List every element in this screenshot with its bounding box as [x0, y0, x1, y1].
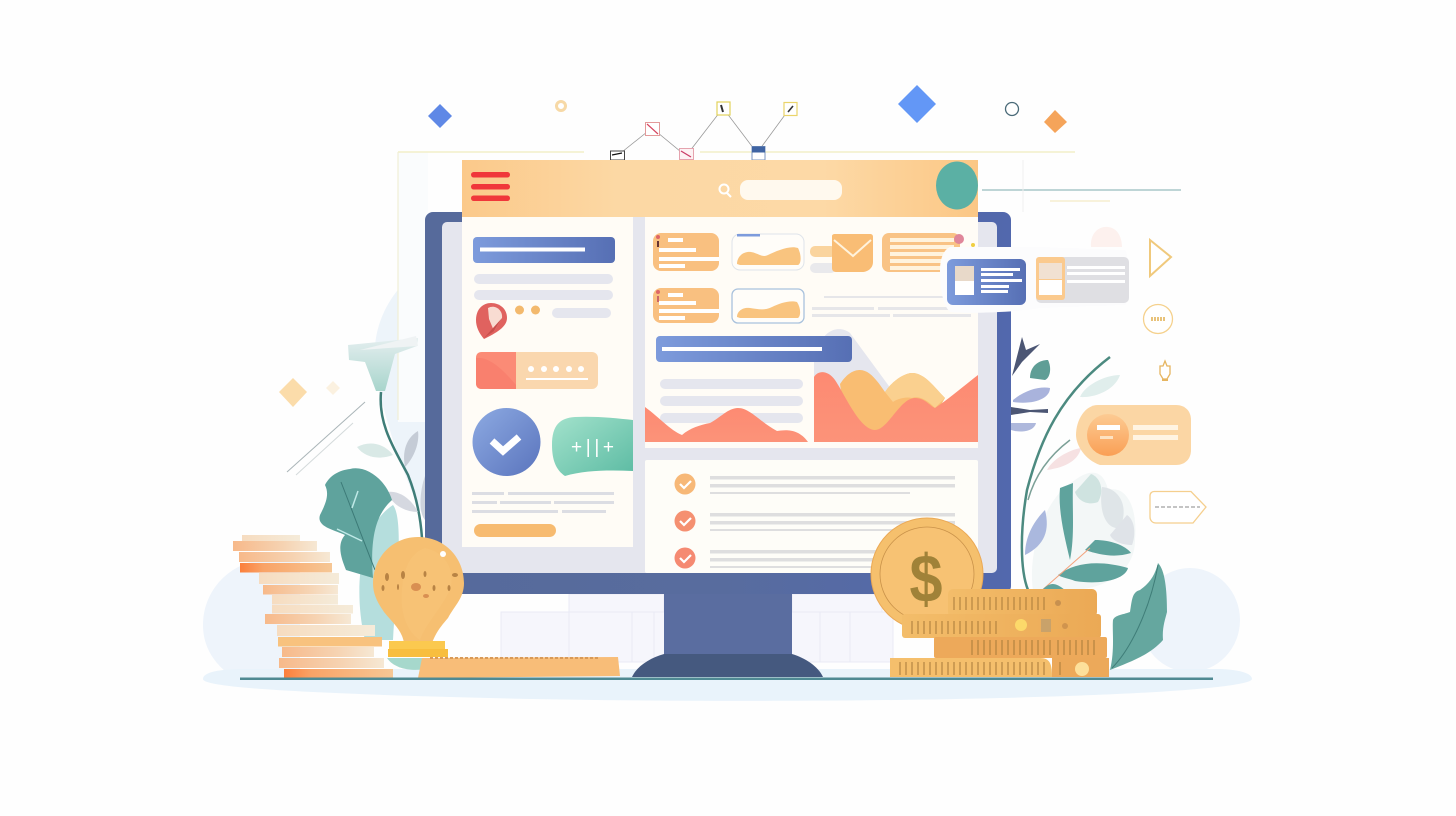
icon: dotted circle: [1144, 304, 1172, 334]
upper right text lines: [812, 296, 971, 317]
summary card 2: [653, 288, 719, 323]
rating dots: [515, 306, 540, 314]
monitor frame: [425, 212, 1011, 594]
left gray text bars: [474, 274, 613, 318]
side leaves: [357, 444, 393, 458]
side leaves: [1080, 375, 1120, 397]
left text lines: [472, 492, 614, 513]
area chart left: [645, 407, 808, 442]
orange callout card: [1076, 405, 1191, 465]
icon: check circle: [472, 408, 540, 476]
dollar coin: [871, 518, 983, 630]
top header bar: [462, 160, 978, 217]
decorative floating shapes: [279, 85, 1067, 475]
mountain backdrop: [814, 329, 930, 442]
icon: hamburger menu: [471, 172, 510, 201]
popup card: [940, 234, 1129, 313]
mini chart card 2: [732, 289, 804, 323]
avatar circle: [936, 162, 978, 210]
summary card 1: [653, 233, 719, 271]
background blobs: [203, 152, 1240, 672]
ground shadow: [203, 669, 1252, 701]
checklist item 3: [674, 548, 955, 568]
left panel: [462, 217, 633, 547]
small pills: [810, 246, 836, 273]
area chart right: [814, 370, 978, 442]
checklist item 2: [674, 510, 955, 532]
right coin stack: [890, 589, 1109, 677]
monstera leaf: [1025, 473, 1135, 592]
tag arrow icon: [1150, 492, 1206, 523]
stem: [381, 392, 422, 538]
left teal leaf: [319, 468, 399, 640]
mini chart card 1: [732, 234, 804, 270]
ground line: [240, 678, 1213, 680]
icon: small bulb: [1160, 361, 1170, 381]
icon: search: [720, 184, 731, 197]
left coin stack: [233, 535, 393, 678]
list card: [882, 233, 960, 272]
search box: [740, 180, 842, 200]
network nodes above monitor: [610, 102, 797, 160]
green chat bubble: +||+: [571, 437, 614, 458]
left heading bar: [473, 237, 615, 263]
coin ridges: [900, 597, 1094, 675]
gray text bars: [660, 379, 803, 423]
monitor stand: [632, 590, 823, 677]
small teal leaf: [1110, 563, 1167, 670]
right plant: [1011, 337, 1167, 670]
green chat bubble: [552, 417, 633, 476]
orange button: [474, 524, 556, 537]
left flower plant: [348, 336, 425, 538]
right lower panel: [645, 460, 978, 573]
rating card: [476, 352, 598, 389]
pink blob behind popup: [1091, 227, 1122, 247]
icon: play triangle: [1150, 240, 1171, 276]
keyboard: [418, 657, 620, 678]
section heading bar: [656, 336, 852, 362]
icon: light bulb: [373, 537, 464, 670]
icon: map pin: [476, 303, 507, 339]
stems: [1022, 357, 1110, 590]
dark back leaf: [1011, 337, 1050, 434]
gray card: [1036, 257, 1129, 303]
icon: envelope: [832, 234, 873, 272]
dollar coin: $: [910, 541, 942, 617]
thin guide lines: [398, 152, 1181, 420]
checklist item 1: [674, 474, 955, 494]
grid under monitor: [501, 594, 893, 662]
blue card: [947, 259, 1026, 305]
flower: [348, 338, 418, 391]
right upper panel: [645, 217, 978, 448]
